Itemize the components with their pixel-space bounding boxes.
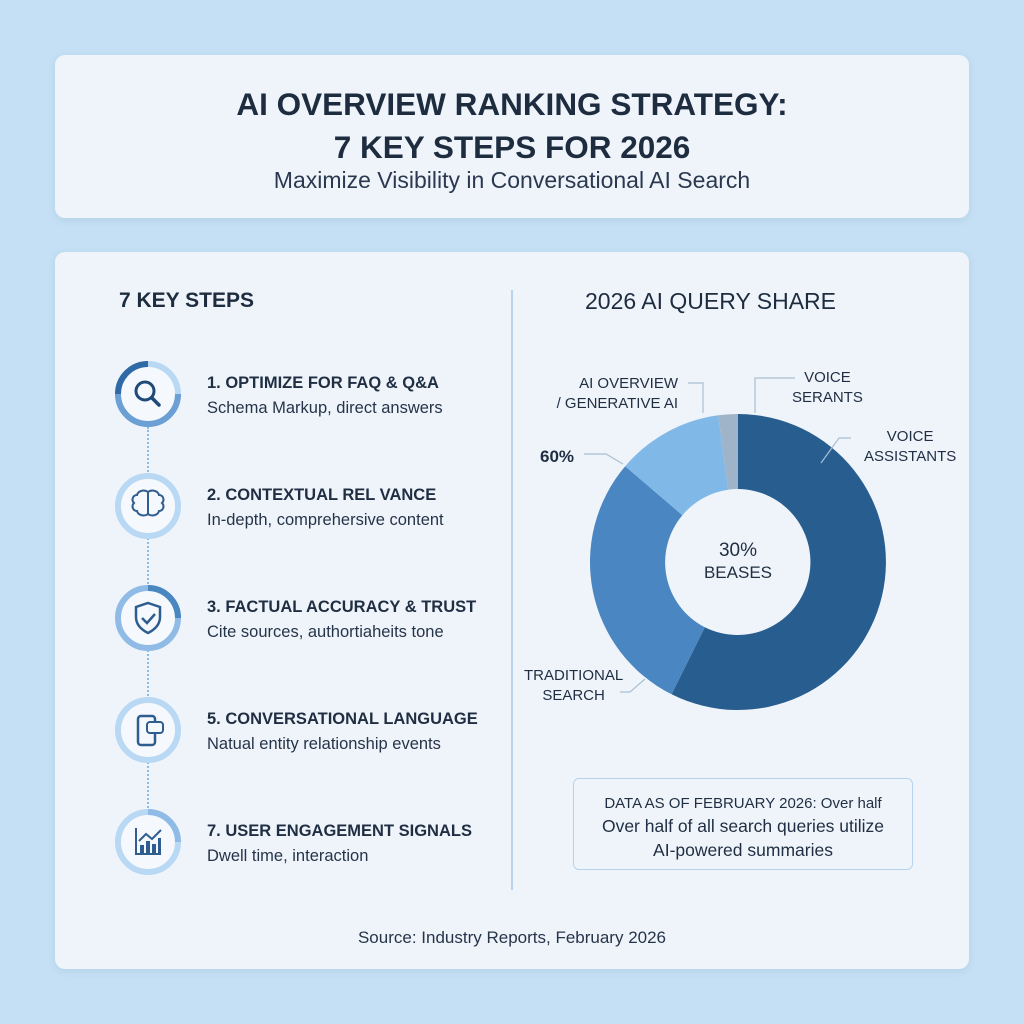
step 3: Cite sources, authortiaheits tone bbox=[207, 623, 444, 641]
donut chart bbox=[584, 377, 886, 710]
main card bbox=[55, 252, 969, 969]
title: AI OVERVIEW RANKING STRATEGY: bbox=[236, 86, 788, 122]
callout bbox=[573, 778, 913, 870]
text: VOICE bbox=[887, 428, 933, 445]
step 7: Dwell time, interaction bbox=[207, 847, 368, 865]
donut chart: 30% bbox=[719, 540, 757, 561]
step 2 bbox=[115, 473, 444, 539]
subtitle: Maximize Visibility in Conversational AI Search bbox=[274, 167, 750, 193]
step 3: 3. FACTUAL ACCURACY & TRUST bbox=[207, 598, 476, 616]
step 1: Schema Markup, direct answers bbox=[207, 399, 443, 417]
icon: chart bbox=[115, 809, 181, 875]
step 5: Natual entity relationship events bbox=[207, 735, 441, 753]
chart heading: 2026 AI QUERY SHARE bbox=[585, 288, 836, 314]
header card bbox=[55, 55, 969, 218]
icon: shield bbox=[115, 585, 181, 651]
text: SEARCH bbox=[542, 687, 605, 704]
title bbox=[236, 86, 788, 165]
source: Source: Industry Reports, February 2026 bbox=[358, 928, 666, 947]
text: VOICE bbox=[804, 369, 851, 386]
chart labels: AI OVERVIEW bbox=[579, 375, 678, 392]
step 3 bbox=[115, 585, 476, 651]
callout: DATA AS OF FEBRUARY 2026: Over half bbox=[604, 795, 882, 812]
step 7: 7. USER ENGAGEMENT SIGNALS bbox=[207, 822, 472, 840]
callout: AI-powered summaries bbox=[653, 840, 833, 860]
steps heading: 7 KEY STEPS bbox=[119, 289, 254, 312]
step 1 bbox=[115, 361, 443, 427]
step 2: 2. CONTEXTUAL REL VANCE bbox=[207, 486, 436, 504]
icon: phone chat bbox=[115, 697, 181, 763]
text: SERANTS bbox=[792, 389, 863, 406]
step 5: 5. CONVERSATIONAL LANGUAGE bbox=[207, 710, 478, 728]
text: TRADITIONAL bbox=[524, 667, 623, 684]
icon: search bbox=[115, 361, 181, 427]
text: ASSISTANTS bbox=[864, 448, 956, 465]
chart labels: / GENERATIVE AI bbox=[557, 395, 678, 412]
donut chart: BEASES bbox=[704, 563, 772, 582]
icon: brain bbox=[115, 473, 181, 539]
text: 60% bbox=[540, 447, 574, 466]
step 5 bbox=[115, 697, 478, 763]
step 1: 1. OPTIMIZE FOR FAQ & Q&A bbox=[207, 374, 439, 392]
chart labels bbox=[556, 375, 678, 412]
step 7 bbox=[115, 809, 472, 875]
callout: Over half of all search queries utilize bbox=[602, 816, 884, 836]
step 2: In-depth, comprehersive content bbox=[207, 511, 444, 529]
title: 7 KEY STEPS FOR 2026 bbox=[334, 129, 690, 165]
